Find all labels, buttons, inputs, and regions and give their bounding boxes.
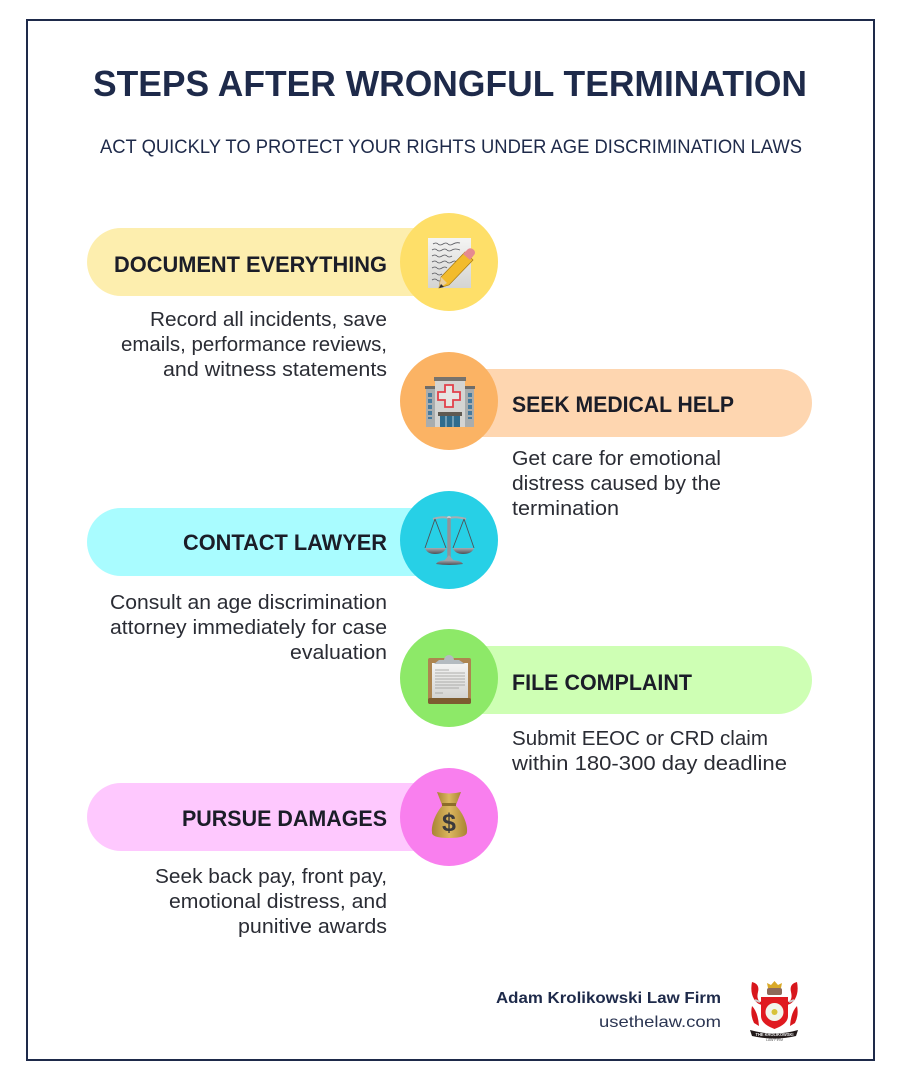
subtitle: ACT QUICKLY TO PROTECT YOUR RIGHTS UNDER AGE DISCRIMINATION LAWS: [100, 137, 802, 158]
step 2 heading: SEEK MEDICAL HELP: [512, 392, 734, 417]
logo: crest: [750, 981, 798, 1042]
step 4 pill: [449, 646, 812, 714]
step 5 icon circle: [400, 768, 498, 866]
step 5: pursue damages: [87, 768, 498, 938]
step 1 description: Record all incidents, save: [150, 309, 387, 331]
step 2 icon circle: [400, 352, 498, 450]
step 5 description: emotional distress, and: [169, 891, 387, 913]
footer website: usethelaw.com: [599, 1014, 721, 1031]
step 2 description: termination: [512, 498, 619, 520]
step 1 description: [121, 309, 387, 381]
step 1 pill: [87, 228, 449, 296]
title: STEPS AFTER WRONGFUL TERMINATION: [93, 63, 807, 104]
step 4 heading: FILE COMPLAINT: [512, 670, 693, 695]
step 3 description: [110, 592, 387, 664]
step 4 icon circle: [400, 629, 498, 727]
icon: money bag: [432, 792, 467, 838]
step 5 pill: [87, 783, 449, 851]
step 2 description: Get care for emotional: [512, 448, 721, 470]
step 4 description: Submit EEOC or CRD claim: [512, 728, 768, 750]
step 2: seek medical help: [400, 352, 812, 520]
step 3 icon circle: [400, 491, 498, 589]
step 1 description: and witness statements: [163, 359, 387, 381]
logo: crest: THE KROLIKOWSKI: [756, 1032, 794, 1037]
step 1 description: emails, performance reviews,: [121, 334, 387, 356]
step 1 heading: DOCUMENT EVERYTHING: [114, 252, 387, 277]
step 5 heading: PURSUE DAMAGES: [182, 806, 387, 831]
step 5 description: punitive awards: [238, 916, 387, 938]
step 3 description: attorney immediately for case: [110, 617, 387, 639]
step 1 icon circle: [400, 213, 498, 311]
step 3 description: evaluation: [290, 642, 387, 664]
icon: clipboard: [428, 655, 471, 704]
icon: memo and pencil: [428, 238, 475, 288]
step 4: file complaint: [400, 629, 812, 775]
icon: balance scale: [425, 516, 474, 565]
step 2 description: [512, 448, 721, 520]
step 3 description: Consult an age discrimination: [110, 592, 387, 614]
logo: crest: LAW FIRM: [766, 1038, 783, 1042]
step 5 description: Seek back pay, front pay,: [155, 866, 387, 888]
icon: money bag: $: [442, 809, 456, 837]
footer firm name: Adam Krolikowski Law Firm: [496, 990, 721, 1007]
step 1: document everything: [87, 213, 498, 381]
step 5 description: [155, 866, 387, 938]
step 2 description: distress caused by the: [512, 473, 721, 495]
step 3 heading: CONTACT LAWYER: [183, 530, 387, 555]
step 4 description: [511, 728, 787, 775]
step 2 pill: [449, 369, 812, 437]
step 4 description: within 180-300 day deadline: [511, 753, 787, 775]
step 3 pill: [87, 508, 449, 576]
step 3: contact lawyer: [87, 491, 498, 664]
icon: hospital: [425, 377, 475, 427]
